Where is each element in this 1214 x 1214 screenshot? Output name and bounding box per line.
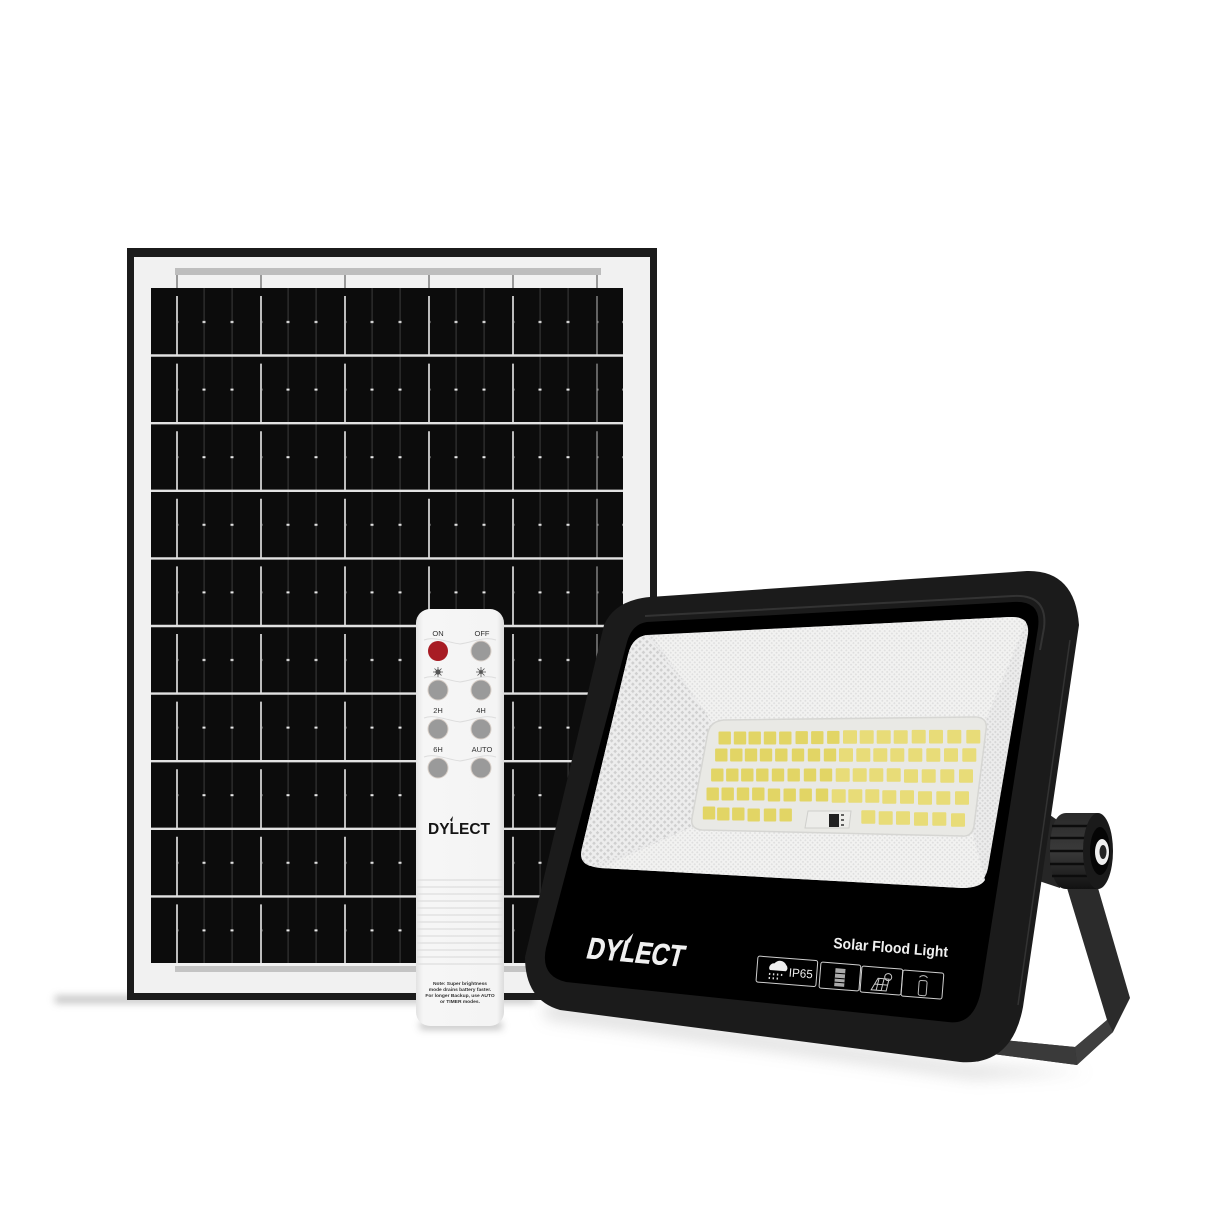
remote brand logo: DYLECT	[428, 821, 491, 838]
badge: battery	[819, 962, 861, 991]
bezel groove	[645, 596, 1044, 650]
remote button labels: ON	[432, 629, 444, 638]
badge: solar panel	[860, 966, 903, 995]
flood light body	[525, 571, 1079, 1062]
shadow under solar panel	[55, 996, 535, 1003]
remote button labels: 4H	[476, 706, 486, 715]
LED array	[703, 730, 980, 827]
remote note	[425, 981, 495, 1005]
reflector glass	[581, 617, 1028, 888]
remote button labels	[432, 629, 493, 754]
remote ridges	[417, 880, 503, 964]
body side highlight	[1018, 640, 1070, 1005]
sensor module	[805, 811, 851, 828]
remote button labels: AUTO	[472, 745, 493, 754]
remote note: Note: Super brightness	[433, 981, 487, 987]
LED board	[692, 717, 986, 836]
adjustment knob	[1036, 808, 1113, 889]
product name: Solar Flood Light	[833, 935, 949, 961]
badge: IP65 rain: IP65	[788, 965, 814, 981]
feature badges	[756, 956, 944, 999]
flood light shadow	[545, 1003, 1090, 1078]
icon: brightness suns	[433, 667, 486, 677]
reflector lower facet	[600, 827, 985, 888]
remote note: mode drains battery faster.	[429, 987, 492, 993]
brand logo: DYLECT	[583, 933, 689, 973]
badge: IP65 rain	[756, 956, 818, 987]
reflector left facet	[581, 635, 712, 866]
remote button labels: OFF	[474, 629, 490, 638]
remote buttons	[428, 641, 491, 778]
remote button labels: 6H	[433, 745, 443, 754]
front bezel	[545, 602, 1038, 1022]
remote shadow	[420, 1022, 502, 1029]
reflector upper facet	[652, 617, 1026, 722]
remote button labels: 2H	[433, 706, 443, 715]
remote note: For longer Backup, use AUTO	[425, 993, 495, 999]
mounting bracket	[985, 888, 1130, 1065]
remote control	[416, 609, 504, 1026]
solar panel	[127, 248, 657, 1000]
badge: remote	[901, 970, 944, 999]
remote note: or TIMER modes.	[440, 999, 481, 1005]
